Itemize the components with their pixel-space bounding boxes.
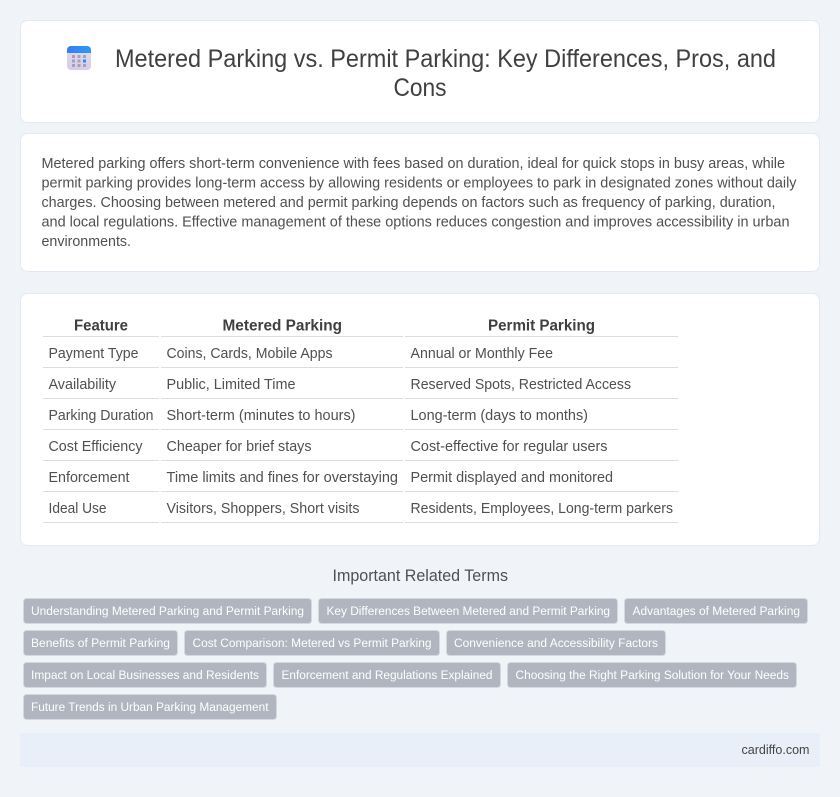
panel: comparison table (20, 294, 820, 546)
tag: advantages: Advantages of Metered Parking (632, 604, 800, 618)
row: parking duration: Short-term (minutes to hours) (166, 408, 356, 424)
tag: cost comparison: Cost Comparison: Metered vs Permit Parking (192, 636, 432, 650)
text block: summary: permit parking provides long-term access by allowing residents or employees to park in designated zones without daily (42, 176, 797, 192)
row: cost efficiency: Cheaper for brief stays (166, 439, 312, 455)
tag: enforcement (274, 662, 500, 688)
tag: cost comparison (184, 630, 440, 656)
row: availability: Reserved Spots, Restricted Access (410, 377, 631, 393)
panel: title card (20, 20, 820, 122)
tag: future trends (24, 694, 276, 720)
row: parking duration: Long-term (days to months) (410, 408, 588, 424)
tag: choosing: Choosing the Right Parking Solution for Your Needs (516, 668, 789, 682)
tag: convenience: Convenience and Accessibility Factors (454, 636, 658, 650)
tag: convenience (446, 630, 666, 656)
table header (74, 318, 595, 334)
row: enforcement: Enforcement (48, 470, 130, 486)
icon: calendar (67, 46, 91, 70)
tag: choosing (508, 662, 796, 688)
row: ideal use: Visitors, Shoppers, Short visits (166, 501, 360, 517)
table header: Permit Parking (488, 318, 595, 334)
tag: advantages (624, 598, 808, 624)
tag: understanding: Understanding Metered Parking and Permit Parking (31, 604, 304, 618)
row: cost efficiency: Cost Efficiency (48, 439, 143, 455)
related term tags (24, 598, 808, 720)
row: ideal use: Residents, Employees, Long-term parkers (410, 501, 673, 517)
row: enforcement: Permit displayed and monitored (410, 470, 613, 486)
panel: summary paragraph (20, 134, 820, 272)
text block: summary (42, 156, 797, 250)
row: availability (48, 377, 631, 393)
row: availability: Availability (48, 377, 117, 393)
row: enforcement: Time limits and fines for overstaying (166, 470, 398, 486)
row: parking duration: Parking Duration (48, 408, 154, 424)
text block: summary: and local regulations. Effective management of these options reduces congestion and improves accessibility in urban (42, 214, 790, 230)
footer: cardiffo.com (742, 742, 810, 757)
heading: related terms: Important Related Terms (332, 567, 508, 585)
row: payment type: Coins, Cards, Mobile Apps (166, 346, 332, 362)
tag: impact (24, 662, 266, 688)
row: payment type: Annual or Monthly Fee (410, 346, 553, 362)
row: enforcement (48, 470, 613, 486)
tag: benefits (24, 630, 178, 656)
table header: Metered Parking (222, 318, 342, 334)
tag: key differences: Key Differences Between Metered and Permit Parking (326, 604, 610, 618)
tag: impact: Impact on Local Businesses and Residents (31, 668, 259, 682)
row: availability: Public, Limited Time (166, 377, 296, 393)
text block: summary: environments. (42, 234, 131, 250)
tag: key differences (318, 598, 618, 624)
row: ideal use: Ideal Use (48, 501, 106, 517)
row: cost efficiency: Cost-effective for regular users (410, 439, 608, 455)
title: Cons (394, 74, 446, 102)
tag: understanding (24, 598, 312, 624)
title (115, 45, 776, 102)
tag: benefits: Benefits of Permit Parking (31, 636, 170, 650)
table header: Feature (74, 318, 128, 334)
tag: future trends: Future Trends in Urban Parking Management (31, 700, 269, 714)
row: parking duration (48, 408, 588, 424)
text block: summary: charges. Choosing between metered and permit parking depends on factors such as frequency of parking, duration, (42, 195, 776, 211)
title: Metered Parking vs. Permit Parking: Key Differences, Pros, and (115, 45, 776, 73)
tag: enforcement: Enforcement and Regulations Explained (282, 668, 492, 682)
footer (20, 733, 820, 767)
row: ideal use (48, 501, 673, 517)
text block: summary: Metered parking offers short-term convenience with fees based on duration, ideal for quick stops in busy areas, while (42, 156, 785, 172)
row: payment type: Payment Type (48, 346, 138, 362)
row: payment type (48, 346, 553, 362)
row: cost efficiency (48, 439, 608, 455)
